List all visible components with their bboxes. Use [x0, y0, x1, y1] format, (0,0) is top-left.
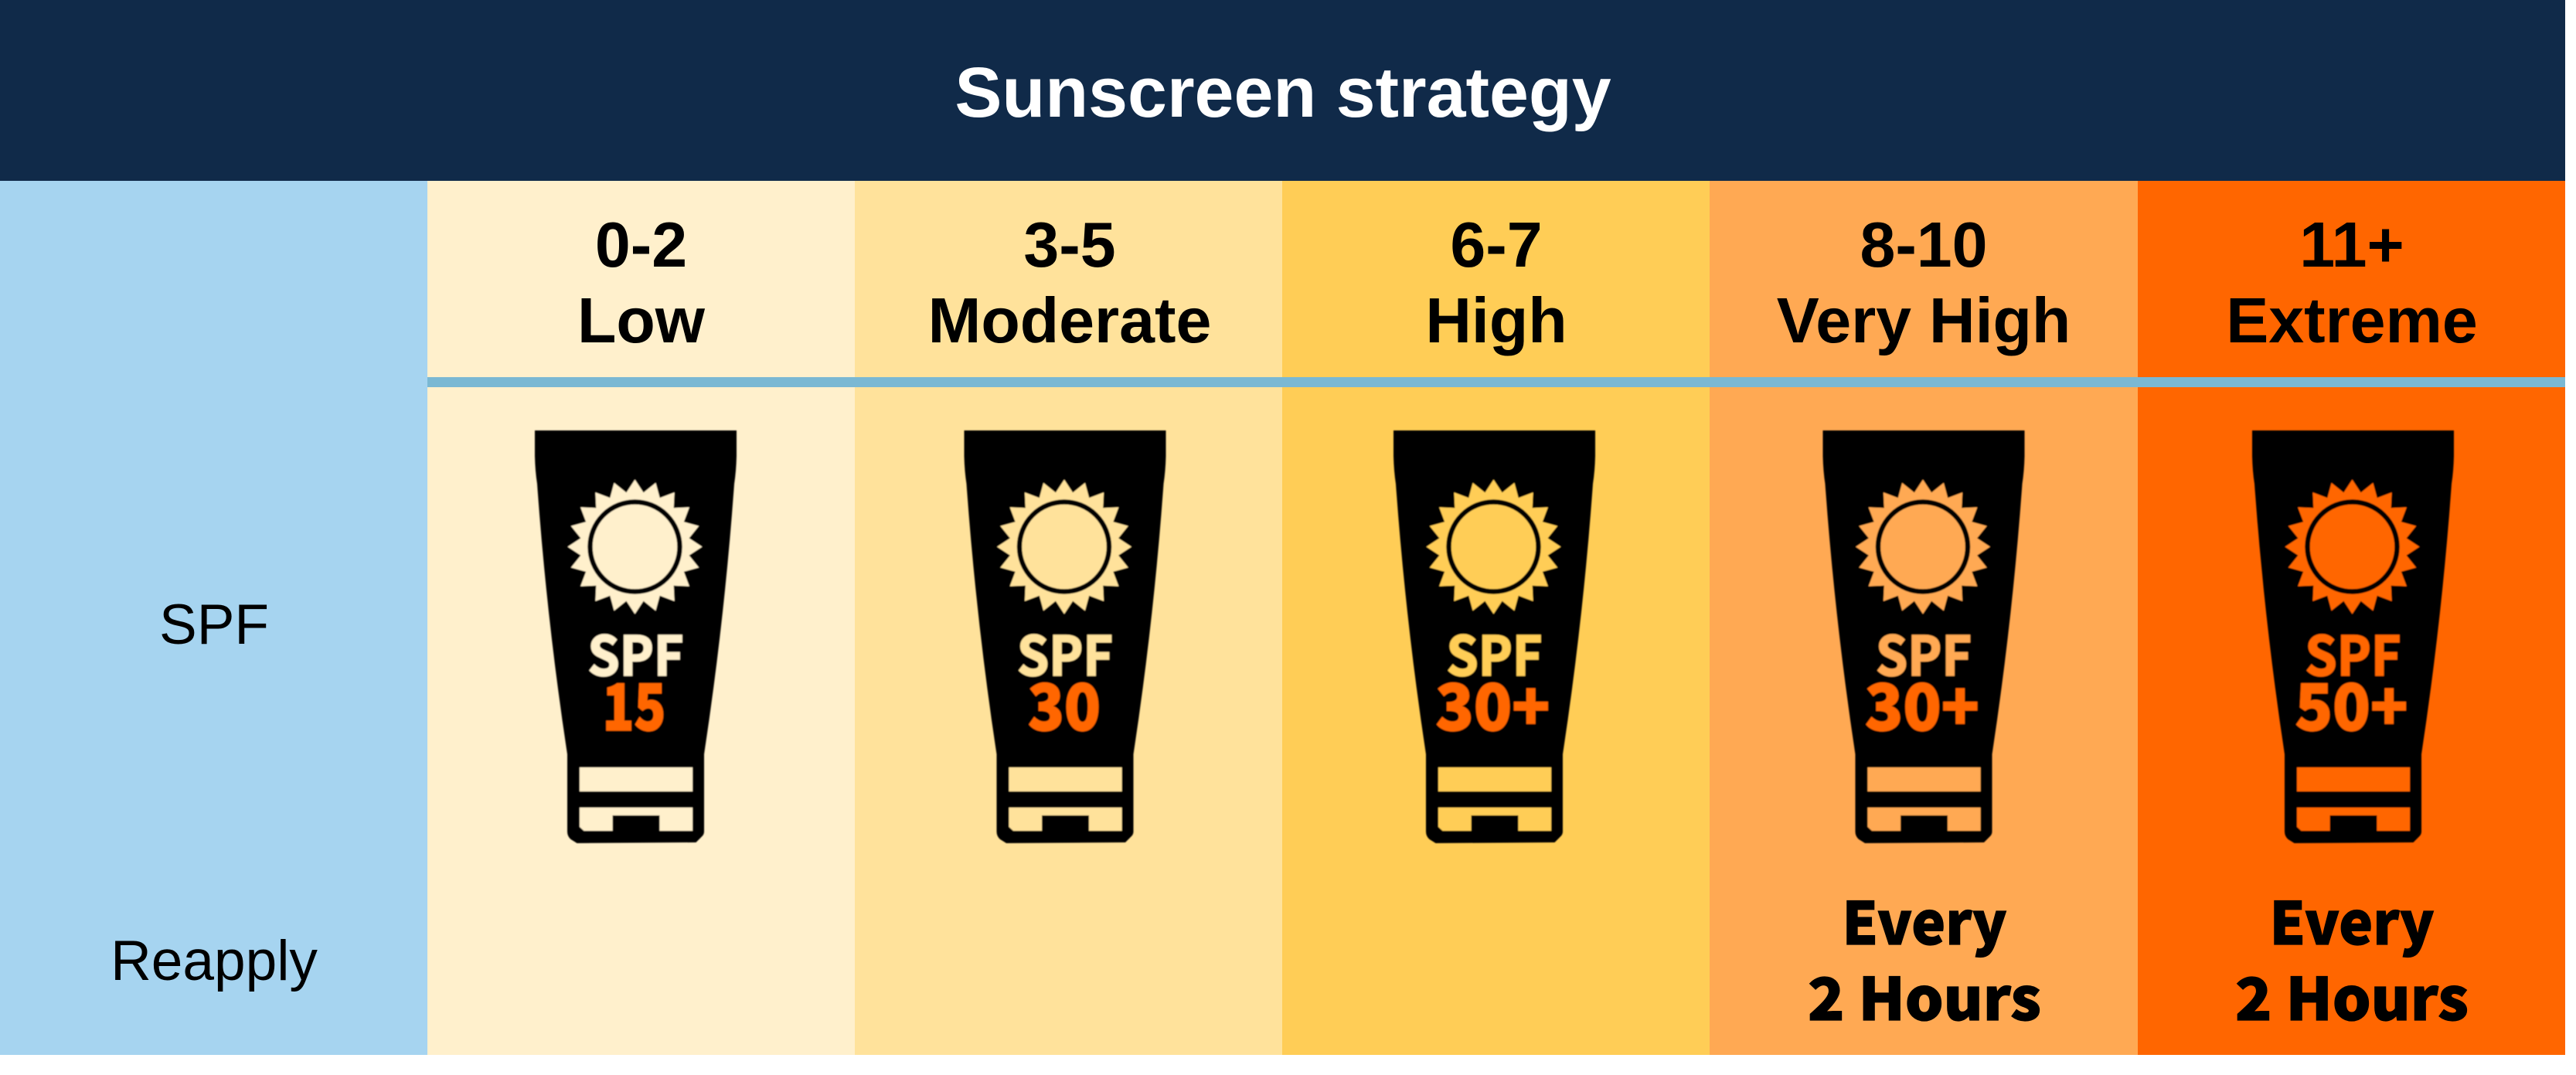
icon: sunscreen tube SPF 30: [965, 430, 1165, 843]
heading: 6-7 High: 6-7: [1450, 209, 1543, 281]
panel: row labels: [0, 181, 427, 1055]
reapply text: extreme: [2235, 876, 2469, 1037]
heading: 0-2 Low: 0-2: [595, 209, 687, 281]
icon: sunscreen tube SPF 50+: SPF: [2305, 614, 2401, 692]
icon: sunscreen tube SPF 50+: [2252, 430, 2454, 843]
heading: 3-5 Moderate: Moderate: [928, 285, 1211, 356]
icon: sunscreen tube SPF 30: SPF: [1017, 614, 1113, 692]
reapply text: extreme: Every: [2269, 876, 2435, 961]
icon: sunscreen tube SPF 30+ (high): [1393, 430, 1595, 843]
column: 8-10 Very High: [1710, 181, 2138, 1055]
heading: 8-10 Very High: Very High: [1777, 285, 2071, 356]
title: Sunscreen strategy: [955, 53, 1611, 132]
icon: sunscreen tube SPF 15: 15: [603, 656, 666, 749]
reapply text: very high: Every: [1843, 876, 2006, 961]
icon: sunscreen tube SPF 50+: 50+: [2295, 656, 2408, 749]
reapply text: extreme: 2 Hours: [2235, 952, 2469, 1037]
row label: Reapply: Reapply: [111, 930, 318, 992]
column: 3-5 Moderate: [855, 181, 1282, 1055]
icon: sunscreen tube SPF 30+ (high): SPF: [1447, 614, 1543, 692]
title banner: [0, 0, 2565, 181]
heading: 11+ Extreme: 11+: [2299, 209, 2404, 281]
icon: sunscreen tube SPF 15: SPF: [587, 614, 683, 692]
heading: 0-2 Low: Low: [577, 285, 706, 356]
column: 0-2 Low: [427, 181, 855, 1055]
heading: 8-10 Very High: 8-10: [1860, 209, 1988, 281]
column: 6-7 High: [1282, 181, 1710, 1055]
reapply text: very high: 2 Hours: [1808, 952, 2041, 1037]
icon: sunscreen tube SPF 15: [535, 430, 737, 843]
heading: 3-5 Moderate: 3-5: [1023, 209, 1116, 281]
icon: sunscreen tube SPF 30+ (high): 30+: [1436, 656, 1550, 749]
icon: sunscreen tube SPF 30: 30: [1028, 656, 1101, 749]
icon: sunscreen tube SPF 30+ (very high): 30+: [1865, 656, 1979, 749]
heading: 11+ Extreme: Extreme: [2226, 285, 2478, 356]
row label: SPF: SPF: [159, 594, 269, 656]
column: 11+ Extreme: [2138, 181, 2565, 1055]
reapply text: very high: [1808, 876, 2041, 1037]
heading: 6-7 High: High: [1425, 285, 1567, 356]
icon: sunscreen tube SPF 30+ (very high): SPF: [1876, 614, 1972, 692]
icon: sunscreen tube SPF 30+ (very high): [1822, 430, 2025, 843]
